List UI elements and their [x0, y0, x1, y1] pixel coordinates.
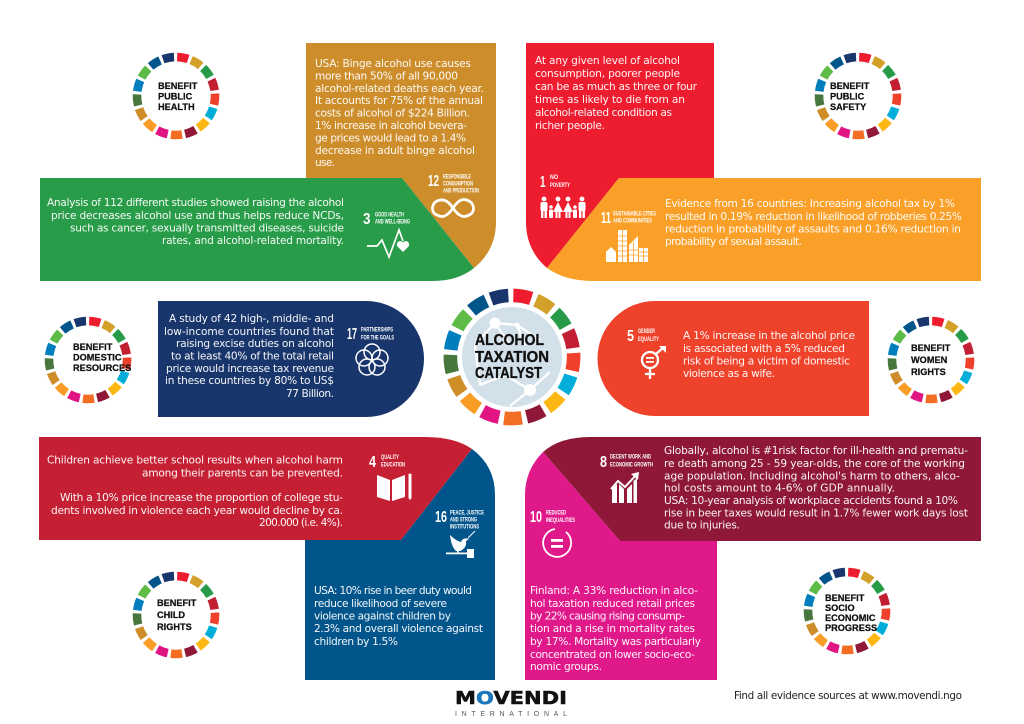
text: 16 countries evidence: probability of sexual assault. — [665, 236, 802, 248]
heading: benefit public safety: BENEFIT — [830, 81, 870, 91]
text: 112 studies evidence: price decreases alcohol use and thus helps reduce NCDs, — [51, 210, 344, 222]
text: poverty evidence: consumption, poorer people — [535, 68, 680, 80]
text: 16 countries evidence: resulted in 0.19% reduction in likelihood of robberies 0.25% — [665, 211, 962, 223]
text: children evidence: dents involved in violence each year would decline by ca. — [51, 505, 343, 517]
logo: Movendi International: MOVENDI — [455, 688, 567, 709]
panel: domestic violence (SDG 5) — [598, 301, 869, 416]
text: 112 studies evidence: such as cancer, sexually transmitted diseases, suicide — [70, 223, 344, 235]
text: binge alcohol evidence: costs of alcohol of $224 Billion. — [315, 108, 470, 120]
ring: benefit child rights — [136, 575, 216, 655]
ring: benefit women rights — [891, 320, 971, 400]
text: poverty evidence — [535, 55, 698, 132]
text: Finland evidence: hol taxation reduced retail prices — [530, 598, 695, 610]
SDG 5 label — [627, 328, 659, 345]
SDG 16 label: INSTITUTIONS — [450, 524, 479, 530]
heading: benefit public health: BENEFIT — [158, 81, 198, 91]
SDG 4 label: QUALITY — [381, 454, 399, 461]
SDG 5 label: EQUALITY — [638, 336, 659, 343]
SDG 16 label: AND STRONG — [450, 516, 477, 524]
text: domestic violence evidence: A 1% increase in the alcohol price — [683, 330, 855, 342]
SDG 17 label: PARTNERSHIPS — [361, 326, 393, 334]
text: Finland evidence — [530, 585, 701, 673]
text: 42 countries evidence: low-income countries found that — [164, 326, 334, 338]
text: working age evidence: rise in beer taxes would result in 1.7% fewer work days lost — [664, 508, 968, 520]
text: children evidence: Children achieve better school results when alcohol harm — [47, 454, 343, 466]
SDG 12 label: 12 — [428, 173, 439, 190]
ring: benefit public safety — [818, 56, 898, 136]
text: binge alcohol evidence — [315, 58, 484, 169]
SDG 12 label: CONSUMPTION — [443, 180, 473, 188]
ring: benefit socio economic progress — [807, 571, 887, 651]
text: Finland evidence: tion and a rise in mortality rates — [530, 623, 695, 635]
icon: dove and gavel — [446, 531, 475, 558]
heading: benefit public safety: SAFETY — [830, 102, 866, 112]
text: working age evidence: age population. Including alcohol's harm to others, alco- — [664, 470, 960, 482]
heading: alcohol taxation catalyst: CATALYST — [475, 365, 542, 382]
heading: benefit domestic resources — [73, 342, 131, 373]
SDG 10 label — [530, 509, 575, 526]
text: 42 countries evidence: A study of 42 high-, middle- and — [169, 313, 334, 325]
SDG 1 label: 1 — [540, 174, 546, 191]
panel: alcohol tax and crime (SDG 11) — [547, 178, 981, 281]
panel: school results (SDG 4) — [39, 437, 472, 540]
SDG 5 label: 5 — [627, 328, 634, 345]
SDG 1 label — [540, 174, 570, 191]
icon: growth chart — [611, 472, 639, 503]
icon: book and pencil — [377, 474, 412, 501]
text: beer duty evidence: USA: 10% rise in beer duty would — [314, 585, 472, 597]
text: binge alcohol evidence: 1% increase in alcohol bevera- — [315, 120, 467, 132]
text: poverty evidence: can be as much as three or four — [535, 81, 698, 93]
panel: violence against children (SDG 16) — [305, 449, 495, 680]
text: 16 countries evidence: reduction in probability of assaults and 0.16% reduction in — [665, 224, 961, 236]
SDG 3 label: AND WELL-BEING — [375, 218, 410, 226]
heading: benefit child rights — [157, 598, 197, 632]
SDG 8 label: 8 — [600, 454, 607, 471]
SDG 16 label — [435, 509, 484, 530]
heading: benefit socio economic progress: PROGRESS — [825, 623, 877, 633]
text: 112 studies evidence: Analysis of 112 different studies showed raising the alcohol — [47, 197, 344, 209]
text: domestic violence evidence: is associated with a 5% reduced — [683, 343, 845, 355]
SDG 17 label: 17 — [347, 326, 357, 343]
text: working age evidence: re death among 25 - 59 year-olds, the core of the working — [664, 458, 965, 470]
text: children evidence: 200.000 (i.e. 4%). — [259, 517, 343, 529]
icon: infinity loop — [432, 199, 474, 217]
heading: benefit public safety — [830, 81, 870, 112]
heading: benefit socio economic progress: BENEFIT — [825, 593, 865, 603]
SDG 12 label — [428, 173, 479, 194]
heading: benefit socio economic progress: SOCIO — [825, 603, 855, 613]
SDG 4 label: 4 — [369, 454, 376, 471]
SDG 8 label: ECONOMIC GROWTH — [610, 462, 653, 468]
SDG 17 label — [347, 326, 394, 343]
footer: evidence sources: Find all evidence sources at www.movendi.ngo — [734, 690, 962, 702]
text: 16 countries evidence: Evidence from 16 countries: Increasing alcohol tax by 1% — [665, 198, 955, 210]
SDG 11 label: 11 — [601, 210, 611, 227]
ring: benefit domestic resources — [48, 320, 131, 400]
text: 112 studies evidence — [47, 197, 344, 247]
heading: benefit women rights: WOMEN — [911, 355, 948, 365]
text: 42 countries evidence: in these countries by 80% to US$ — [165, 375, 334, 387]
heading: alcohol taxation catalyst: TAXATION — [475, 349, 549, 366]
text: domestic violence evidence: risk of being a victim of domestic — [683, 356, 850, 368]
SDG 8 label — [600, 454, 653, 471]
heading: benefit child rights: BENEFIT — [157, 598, 197, 608]
SDG 10 label: 10 — [530, 509, 542, 526]
logo: Movendi International — [455, 688, 567, 718]
globe background — [462, 307, 562, 407]
heading: benefit public health: PUBLIC — [158, 91, 193, 101]
text: binge alcohol evidence: more than 50% of all 90,000 — [315, 70, 458, 82]
text: beer duty evidence: children by 1.5% — [314, 636, 398, 648]
SDG 11 label — [601, 210, 656, 227]
text: Finland evidence: by 22% causing rising consump- — [530, 610, 685, 622]
icon: city buildings — [606, 230, 648, 262]
heading: benefit child rights: CHILD — [157, 610, 185, 620]
SDG 11 label: SUSTAINABLE CITIES — [613, 210, 656, 218]
heading: benefit domestic resources: BENEFIT — [73, 342, 113, 352]
text: poverty evidence: richer people. — [535, 120, 605, 132]
SDG 5 label: GENDER — [638, 328, 655, 335]
heading: benefit women rights: BENEFIT — [911, 343, 951, 353]
text: binge alcohol evidence: It accounts for 75% of the annual — [315, 95, 483, 107]
panel: USA binge alcohol (SDG 12) — [306, 43, 496, 268]
SDG 8 label: DECENT WORK AND — [610, 454, 651, 460]
text: working age evidence: Globally, alcohol is #1risk factor for ill-health and prematu- — [664, 445, 968, 457]
panel: Finland tax reduction (SDG 10) — [525, 452, 717, 680]
panel: raising alcohol price studies (SDG 3) — [40, 178, 474, 281]
text: Finland evidence: Finland: A 33% reduction in alco- — [530, 585, 698, 597]
text: children evidence: With a 10% price increase the proportion of college stu- — [60, 492, 343, 504]
text: beer duty evidence: violence against children by — [314, 610, 451, 622]
text: Finland evidence: by 17%. Mortality was particularly — [530, 636, 701, 648]
panel: excise duties study (SDG 17) — [158, 301, 424, 417]
text: domestic violence evidence — [683, 330, 855, 380]
text: poverty evidence: At any given level of alcohol — [535, 55, 680, 67]
text: Finland evidence: concentrated on lower socio-eco- — [530, 649, 695, 661]
text: binge alcohol evidence: use. — [315, 157, 335, 169]
text: beer duty evidence: 2.3% and overall violence against — [314, 623, 483, 635]
icon: family — [540, 197, 586, 218]
heading: benefit domestic resources: RESOURCES — [73, 363, 131, 373]
text: children evidence: among their parents can be prevented. — [142, 468, 343, 480]
SDG 3 label: GOOD HEALTH — [375, 212, 404, 218]
heading: benefit public safety: PUBLIC — [830, 91, 865, 101]
SDG 3 label: 3 — [363, 211, 371, 228]
SDG 10 label: INEQUALITIES — [546, 517, 575, 524]
text: working age evidence: due to injuries. — [664, 520, 740, 532]
heading: benefit women rights — [911, 343, 951, 377]
text: beer duty evidence — [314, 585, 483, 648]
text: binge alcohol evidence: USA: Binge alcohol use causes — [315, 58, 471, 70]
text: binge alcohol evidence: decrease in adult binge alcohol — [315, 145, 475, 157]
SDG 12 label: RESPONSIBLE — [443, 174, 471, 180]
heading: benefit socio economic progress — [825, 593, 877, 633]
text: 16 countries evidence — [665, 198, 962, 248]
icon: five linked rings — [356, 344, 388, 375]
text: 42 countries evidence: raising excise duties on alcohol — [176, 338, 334, 350]
text: working age evidence: hol costs amount to 4-6% of GDP annually. — [664, 482, 895, 494]
SDG 4 label: EDUCATION — [381, 462, 405, 468]
text: Finland evidence: nomic groups. — [530, 661, 602, 673]
SDG 1 label: POVERTY — [550, 182, 570, 189]
SDG 16 label: 16 — [435, 509, 447, 526]
text: 42 countries evidence: to at least 40% of the total retail — [171, 350, 334, 362]
SDG 12 label: AND PRODUCTION — [443, 188, 479, 194]
central ring: alcohol taxation catalyst — [449, 294, 575, 420]
SDG 16 label: PEACE, JUSTICE — [450, 510, 484, 516]
text: working age evidence — [664, 445, 968, 532]
ring: benefit public health — [136, 56, 216, 136]
heading: benefit public health — [158, 81, 198, 112]
heading: benefit domestic resources: DOMESTIC — [73, 352, 122, 362]
SDG 4 label — [369, 454, 405, 471]
text: 42 countries evidence: price would increase tax revenue — [166, 363, 334, 375]
text: poverty evidence: alcohol-related condition as — [535, 107, 672, 119]
heading: benefit child rights: RIGHTS — [157, 622, 192, 632]
text: children evidence — [47, 454, 343, 529]
SDG 1 label: NO — [550, 174, 558, 181]
text: binge alcohol evidence: alcohol-related deaths each year. — [315, 83, 484, 95]
text: binge alcohol evidence: ge prices would lead to a 1.4% — [315, 132, 466, 144]
panel: poorer people risk (SDG 1) — [526, 43, 714, 268]
SDG 10 label: REDUCED — [546, 510, 566, 516]
text: 112 studies evidence: rates, and alcohol-related mortality. — [162, 235, 344, 247]
icon: gender equality — [642, 346, 666, 379]
logo: Movendi International: INTERNATIONAL — [455, 711, 567, 718]
SDG 3 label — [363, 211, 410, 228]
heading: benefit socio economic progress: ECONOMIC — [825, 613, 876, 623]
heading: alcohol taxation catalyst — [475, 332, 549, 382]
text: 42 countries evidence: 77 Billion. — [286, 388, 334, 400]
panel: workplace risk (SDG 8) — [543, 437, 981, 541]
text: poverty evidence: times as likely to die from an — [535, 94, 685, 106]
heading: benefit women rights: RIGHTS — [911, 367, 946, 377]
text: working age evidence: USA: 10-year analysis of workplace accidents found a 10% — [664, 495, 958, 507]
text: beer duty evidence: reduce likelihood of severe — [314, 598, 447, 610]
icon: reduced inequalities — [543, 529, 571, 557]
SDG 17 label: FOR THE GOALS — [361, 334, 394, 342]
heading: alcohol taxation catalyst: ALCOHOL — [475, 332, 544, 349]
SDG 11 label: AND COMMUNITIES — [613, 218, 652, 224]
text: domestic violence evidence: violence as a wife. — [683, 368, 775, 380]
heading: benefit public health: HEALTH — [158, 102, 195, 112]
text: 42 countries evidence — [164, 313, 334, 400]
icon: heartbeat — [367, 230, 409, 257]
